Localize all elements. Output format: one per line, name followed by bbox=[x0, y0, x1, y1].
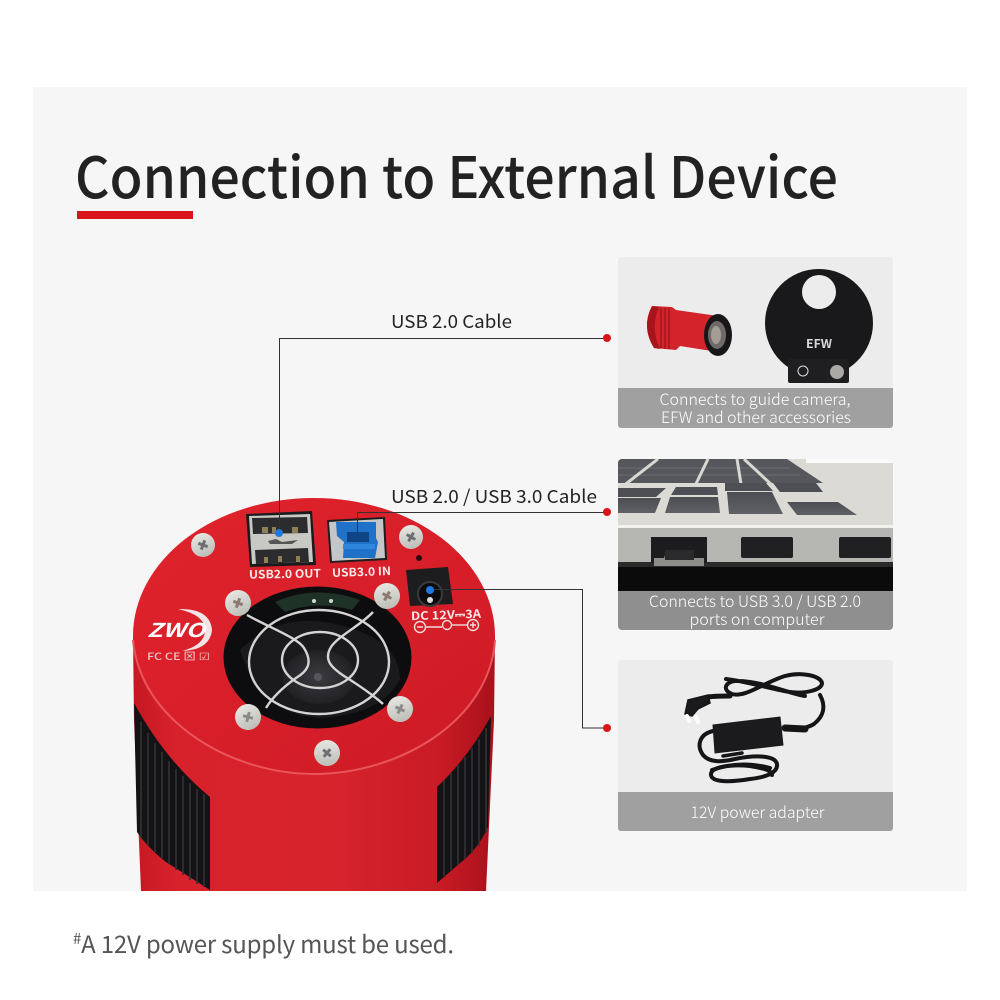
title: Connection to External Device bbox=[75, 133, 838, 215]
caption bbox=[618, 792, 893, 831]
camera: USB3.0 IN bbox=[332, 563, 391, 581]
camera body bbox=[133, 636, 495, 891]
footnote: # bbox=[73, 928, 81, 949]
filter wheel: EFW bbox=[806, 335, 832, 352]
zwo logo bbox=[147, 609, 212, 651]
filter wheel bbox=[765, 269, 873, 383]
certification marks: FC CE ⊠ ☑ bbox=[147, 648, 210, 663]
indicator hole bbox=[416, 555, 422, 561]
fan grill bbox=[247, 610, 389, 714]
keyboard bbox=[618, 459, 893, 528]
connector: usb 2.0 bbox=[275, 334, 611, 537]
dc label: DC 12V⎓3A bbox=[411, 606, 482, 624]
camera bbox=[133, 498, 495, 891]
card: power adapter: 12V power adapter bbox=[690, 799, 825, 823]
right cooling fins bbox=[437, 716, 491, 883]
usb labels: USB2.0 OUT bbox=[249, 565, 321, 583]
adapter illustration bbox=[685, 674, 823, 781]
card: accessories: Connects to guide camera, bbox=[660, 386, 850, 410]
card: computer bbox=[618, 459, 893, 630]
title underline bbox=[77, 211, 193, 219]
card: power adapter bbox=[618, 660, 893, 831]
caption bbox=[618, 591, 893, 630]
camera top disc bbox=[133, 498, 495, 731]
background panel bbox=[33, 87, 967, 891]
zwo logo: ZWO bbox=[147, 616, 208, 643]
connector: power bbox=[426, 586, 611, 732]
card: computer: Connects to USB 3.0 / USB 2.0 bbox=[649, 588, 861, 612]
polarity symbol bbox=[414, 620, 478, 632]
label: usb 2.0 cable: USB 2.0 Cable bbox=[391, 308, 512, 334]
card: computer: ports on computer bbox=[690, 606, 825, 630]
fan opening bbox=[224, 586, 412, 728]
dc jack bbox=[406, 567, 453, 606]
screws bbox=[188, 521, 427, 771]
guide camera bbox=[647, 306, 732, 356]
left cooling fins bbox=[134, 703, 210, 890]
card: accessories: EFW and other accessories bbox=[661, 404, 851, 428]
usb 3.0 port bbox=[327, 517, 387, 563]
card: accessories bbox=[618, 257, 893, 428]
label: usb 2.0 / usb 3.0 cable: USB 2.0 / USB 3.0 Cable bbox=[391, 483, 597, 509]
footnote: A 12V power supply must be used. bbox=[81, 925, 454, 960]
laptop edge with ports bbox=[618, 528, 893, 591]
usb 2.0 port bbox=[246, 511, 316, 567]
caption bbox=[618, 388, 893, 428]
connector: usb 3.0 bbox=[358, 508, 611, 535]
